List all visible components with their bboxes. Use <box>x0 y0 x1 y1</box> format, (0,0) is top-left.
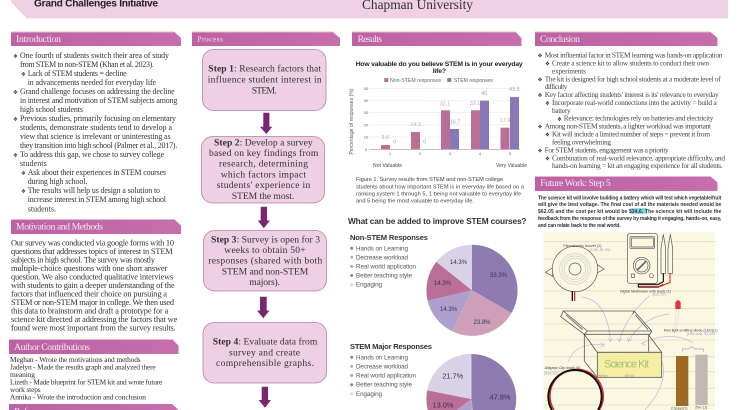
bar chart: STEM value: 40 <box>481 91 487 97</box>
icon: copper and zinc strips <box>671 355 708 410</box>
conclusion bullet list: The kit is designed for high school students at a moderate level of <box>545 74 721 83</box>
future work paragraph: will give the best voltage. The final cost of all the materials needed would be <box>537 202 722 208</box>
heading: motivation and methods <box>11 219 181 234</box>
intro bullet list: To address this gap, we chose to survey college <box>20 150 164 159</box>
contributions text: Jadelyn - Made the results graph and analyzed there <box>10 362 156 372</box>
step 2 box: STEM the most. <box>232 191 294 202</box>
conclusion bullet list: Most influential factor in STEM learning was hands-on application <box>545 51 723 60</box>
step 1 box: STEM. <box>252 85 277 96</box>
intro bullet list: Previous studies, primarily focusing on elementary <box>20 114 176 123</box>
methods paragraph: STEM or non-STEM major in college. We then used <box>11 298 175 307</box>
step 2 box: Step 2: Develop a survey <box>214 137 313 148</box>
intro bullet list: Ask about their experiences in STEM courses <box>28 168 166 177</box>
science kit blueprint illustration: (Low cost, $1.99) <box>687 332 715 336</box>
methods paragraph: found were most important from the survey results. <box>11 323 176 332</box>
pie panel: non-STEM responses: Non-STEM Responses <box>350 233 428 242</box>
science kit blueprint illustration: Piezoelectric buzzer (1) <box>563 244 602 248</box>
bar chart: STEM value: 14.3 <box>410 122 421 128</box>
intro bullet list: in interest and motivation of STEM subjects among <box>20 96 177 105</box>
conclusion bullet list: ❖ <box>538 54 542 60</box>
conclusion bullet list: ❖ <box>545 133 550 139</box>
conclusion bullet list: ❖ <box>545 156 550 162</box>
conclusion bullet list: ❖ <box>538 77 542 83</box>
figure caption: Figure 1. Survey results from STEM and non-STEM college <box>356 177 503 183</box>
conclusion bullet list: feeling overwhelming <box>552 138 611 147</box>
methods paragraph: with students to gain a deeper understanding of the <box>11 281 175 290</box>
panel: introduction <box>11 32 181 214</box>
arrow 4 <box>259 387 271 408</box>
bar chart: STEM value: 32.1 <box>470 101 480 107</box>
step 3 box: responses (shared with both <box>208 256 323 267</box>
heading: conclusion: Conclusion <box>540 34 580 45</box>
bar chart: STEM value: Not Valuable <box>373 163 402 169</box>
title banner <box>11 0 728 18</box>
pie panel: non-STEM responses: 33.3% <box>490 273 508 279</box>
pie panel: STEM major responses: Better teaching style <box>356 382 412 389</box>
contributions text: Meghan - Wrote the motivations and methods <box>10 355 141 364</box>
heading: process: Process <box>198 34 223 43</box>
bar chart: STEM value: STEM responses <box>454 78 493 84</box>
cost highlight <box>631 208 647 214</box>
methods paragraph: question. We also conducted qualitative interviews <box>11 272 173 281</box>
science kit blueprint illustration: Science Kit <box>604 358 649 370</box>
conclusion bullet list: Create a science kit to allow students to conduct their own <box>552 58 709 68</box>
pie panel: non-STEM responses: Engaging <box>356 282 382 289</box>
methods paragraph: subjects in high school. The survey was mostly <box>11 255 156 264</box>
contributions text: meaning <box>10 370 35 379</box>
science kit blueprint illustration: Alligator Clip leads (4) <box>545 366 580 370</box>
panel: results <box>348 32 527 410</box>
intro bullet list: ❖ <box>21 72 26 78</box>
pie panel: STEM major responses: STEM Major Responses <box>350 342 432 351</box>
icon: copper and zinc strips: Zinc (1) <box>695 406 707 410</box>
figure caption: and 5 being the most valuable to everyday life. <box>356 199 474 205</box>
conclusion bullet list: battery <box>552 106 571 115</box>
bar chart: STEM value <box>349 61 527 169</box>
bar chart: STEM value: 40 <box>364 98 369 103</box>
panel: author contributions <box>9 339 178 402</box>
intro bullet list: One fourth of students switch their area of study <box>20 51 169 60</box>
conclusion bullet list: ❖ <box>538 93 542 99</box>
bar chart: STEM value: 50 <box>364 86 369 91</box>
step 3 box: weeks to obtain 50+ <box>224 245 306 256</box>
figure caption <box>356 177 525 205</box>
conclusion bullet list: Key factor affecting students' interest is its' relevance to everyday <box>545 90 719 99</box>
intro bullet list: ❖ <box>13 90 18 96</box>
future work paragraph: The science kit will involve building a battery which will test which vegetable/fruit <box>538 195 722 201</box>
conclusion bullet list: Combination of real-world relevance, appropriate difficulty, and <box>552 153 725 162</box>
pie panel: non-STEM responses: 14.3% <box>434 281 452 287</box>
intro bullet list: students. <box>28 205 56 214</box>
arrows: parts into kit <box>568 296 703 410</box>
pie panel: non-STEM responses: Better teaching style <box>356 272 412 280</box>
pie panel: STEM major responses: 13.0% <box>433 400 454 410</box>
bar chart: STEM value: 17.9 <box>500 118 510 124</box>
panel: motivation and methods <box>11 219 181 332</box>
heading: conclusion <box>535 32 718 46</box>
icon: piezo buzzer <box>545 246 604 301</box>
bar chart: STEM value: 43.3 <box>509 87 520 93</box>
intro bullet list: Lack of STEM students = decline <box>28 69 127 78</box>
icon: alligator clip wires <box>548 369 603 410</box>
methods paragraph: questions that addresses topics of interest in STEM <box>11 247 173 256</box>
intro bullet list: increase interest in STEM among high school <box>28 195 167 204</box>
panel: conclusion <box>535 32 725 170</box>
heading: author contributions <box>9 339 178 354</box>
intro bullet list: they transition into high school (Palmer et al., 2017). <box>20 141 177 150</box>
conclusion bullet list: Incorporate real-world connections into the activity = build a <box>552 98 717 107</box>
future work paragraph <box>537 195 722 229</box>
science kit blueprint illustration <box>543 232 717 410</box>
pie panel: STEM major responses: Hands on Learning <box>356 354 408 361</box>
pie panel: STEM major responses: Engaging <box>356 391 382 398</box>
heading: references <box>9 404 178 410</box>
bar chart: STEM value: 30 <box>364 110 369 115</box>
step 1 box: influence student interest in <box>208 74 322 86</box>
science kit blueprint illustration: Kit box <box>598 374 608 378</box>
step 2 box: based on key findings from <box>209 148 319 159</box>
bar chart: STEM value: Percentage of responses (%) <box>349 88 355 154</box>
pie panel: non-STEM responses: Hands on Learning <box>356 245 408 252</box>
icon: red LED <box>674 300 681 330</box>
methods paragraph: science kit directed at addressing the factors that we <box>11 315 178 324</box>
conclusion bullet list: For STEM students, engagement was a priority <box>545 145 669 154</box>
intro bullet list: in advancements needed for everyday life <box>28 78 156 87</box>
step 3 box: majors). <box>249 277 280 288</box>
bar chart: STEM value: 0 <box>365 147 368 152</box>
conclusion bullet list: ❖ <box>538 148 542 154</box>
icon: science kit box <box>561 311 662 377</box>
conclusion bullet list: experiments <box>552 66 586 75</box>
methods paragraph: Our survey was conducted via google forms with 10 <box>11 238 174 247</box>
step 4 box <box>203 322 326 383</box>
step 3 box <box>204 230 326 291</box>
pie panel: non-STEM responses: 14.3% <box>440 307 458 313</box>
panel: future work <box>535 176 722 410</box>
pie panel: non-STEM responses <box>350 233 518 336</box>
intro bullet list: during high school. <box>28 177 87 186</box>
bar chart: STEM value: 3.6 <box>382 135 389 141</box>
step 4 box: Step 4: Evaluate data from <box>213 337 318 348</box>
conclusion bullet list: Kit will include a limited number of steps = prevent it from <box>552 129 710 138</box>
heading: introduction <box>11 32 181 46</box>
intro bullet list: ❖ <box>13 153 18 159</box>
intro bullet list: from STEM to non-STEM (Khan et al. 2023). <box>20 60 154 69</box>
contributions text: Annika - Wrote the introduction and conclusion <box>10 392 146 402</box>
bar chart: STEM value: 3 <box>449 151 452 156</box>
science kit blueprint illustration: ($14.99) <box>544 371 558 375</box>
step 2 box: students' experience in <box>217 180 311 191</box>
pie panel: STEM major responses: 47.8% <box>490 392 511 402</box>
methods paragraph <box>11 238 178 332</box>
contributions text <box>10 355 163 402</box>
step 2 box <box>202 136 324 203</box>
bar chart: STEM value: 16.7 <box>450 120 460 126</box>
conclusion bullet list: ❖ <box>538 125 542 131</box>
step 3 box: STEM and non-STEM <box>222 266 309 277</box>
step 1 box <box>202 50 326 110</box>
conclusion bullet list: difficulty <box>545 82 568 91</box>
bar chart: STEM value: 0 <box>393 140 396 146</box>
pie panel: STEM major responses <box>350 342 516 410</box>
bar chart: STEM value: 0 <box>423 140 426 146</box>
intro bullet list: ❖ <box>21 171 26 177</box>
contributions text: Lizeth - Made blueprint for STEM kit and wrote future <box>10 378 163 386</box>
heading: introduction: Introduction <box>16 34 61 45</box>
heading: results <box>352 32 522 46</box>
conclusion bullet list: hands-on learning = kit an engaging experience for all students. <box>552 161 723 170</box>
bar chart: STEM value: 10 <box>364 135 369 140</box>
arrow 1 <box>260 113 272 134</box>
step 2 box: research, determining <box>219 159 308 170</box>
science kit blueprint illustration: Red light-emitting diode (LED)(1) <box>664 329 717 333</box>
intro bullet list: The results will help us design a solution to <box>28 186 160 195</box>
arrow 2 <box>258 207 270 228</box>
bar chart: STEM value: 32.1 <box>440 101 450 107</box>
heading: author contributions: Author Contributions <box>14 342 90 353</box>
pie panel: non-STEM responses: 23.8% <box>473 320 491 326</box>
heading: improve STEM courses: What can be added to improve STEM courses? <box>348 216 526 226</box>
intro bullet list: ❖ <box>13 54 18 60</box>
intro bullet list: ❖ <box>13 117 18 123</box>
pie panel: non-STEM responses: Decrease workload <box>356 254 408 261</box>
conclusion bullet list <box>538 51 725 170</box>
step 4 box: comprehensible graphs. <box>216 358 314 369</box>
methods paragraph: this data to brainstorm and draft a prototype for a <box>11 306 169 315</box>
bar chart: STEM value: 5 <box>509 151 512 156</box>
step 4 box: survey and create <box>229 347 300 358</box>
heading: motivation and methods: Motivation and Methods <box>16 222 103 233</box>
intro bullet list: students, demonstrate students tend to develop a <box>20 123 172 132</box>
conclusion bullet list: ❖ <box>545 62 550 68</box>
future work paragraph: and can relate back to the real world. <box>538 223 621 229</box>
step 3 box: Step 3: Survey is open for 3 <box>211 234 320 245</box>
science kit blueprint illustration: (2.99, $1.99) <box>589 248 610 252</box>
icon: digital multimeter <box>627 233 673 287</box>
science kit blueprint illustration: ($15.99) <box>652 292 666 296</box>
intro bullet list: view that science is irrelevant or uninteresting as <box>20 132 171 141</box>
bar chart: STEM value: 20 <box>364 122 369 127</box>
bar chart: STEM value: How valuable do you believe STEM is in your everyday <box>356 61 523 68</box>
bar chart: STEM value: 1 <box>389 151 392 156</box>
figure caption: ranking system 1 through 5, 1 being not valuable to everyday life <box>356 192 521 198</box>
intro bullet list: high school students <box>20 105 83 114</box>
heading: future work step 5: Future Work: Step 5 <box>540 178 611 189</box>
future work paragraph: $62.05 and the cost per kit would be $34.6. The science kit will include the <box>538 209 722 215</box>
intro bullet list: ❖ <box>21 189 26 195</box>
bar chart: STEM value: Very Valuable <box>496 163 527 169</box>
heading: process <box>192 32 340 46</box>
methods paragraph: multiple-choice questions with one short answer <box>11 264 168 273</box>
science kit blueprint illustration: $19.92 <box>625 374 634 378</box>
pie panel: STEM major responses: Decrease workload <box>356 363 408 370</box>
bar chart: STEM value: 4 <box>479 151 482 156</box>
bar chart: STEM value: life? <box>433 68 446 75</box>
arrow 3 <box>257 297 270 318</box>
intro bullet list: students <box>20 159 47 168</box>
heading: results: Results <box>358 34 382 45</box>
step 1 box: Step 1: Research factors that <box>208 64 321 75</box>
pie panel: STEM major responses: Real world application <box>356 372 416 380</box>
intro bullet list <box>13 51 177 214</box>
conclusion bullet list: ❖ <box>557 117 562 123</box>
bar chart: STEM value: Non-STEM responses <box>390 78 441 84</box>
future work paragraph: feedback from the response of the survey by making it engaging, hands-on, easy, <box>538 216 722 222</box>
intro bullet list: Grand challenge focuses on addressing the decline <box>20 87 175 96</box>
heading: future work step 5 <box>535 176 718 191</box>
figure caption: students about how important STEM is in everyday life based on a <box>356 184 525 190</box>
panel: process flow <box>192 32 340 408</box>
bar chart: STEM value: 2 <box>419 151 422 156</box>
conclusion bullet list: Among non-STEM students, a lighter workload was important <box>545 122 711 131</box>
step 2 box: which factors impact <box>221 169 306 180</box>
pie panel: STEM major responses: 21.7% <box>442 372 464 380</box>
methods paragraph: factors that influenced their choice on pursuing a <box>11 289 167 298</box>
pie panel: non-STEM responses: 14.3% <box>450 260 468 266</box>
contributions text: work steps <box>10 385 41 394</box>
science kit blueprint illustration: Digital Multimeter with leads (1) <box>620 289 671 293</box>
pie panel: non-STEM responses: Real world application <box>356 263 416 270</box>
conclusion bullet list: ❖ <box>545 101 550 107</box>
conclusion bullet list: Relevance: technologies rely on batteries and electricity <box>564 114 714 123</box>
